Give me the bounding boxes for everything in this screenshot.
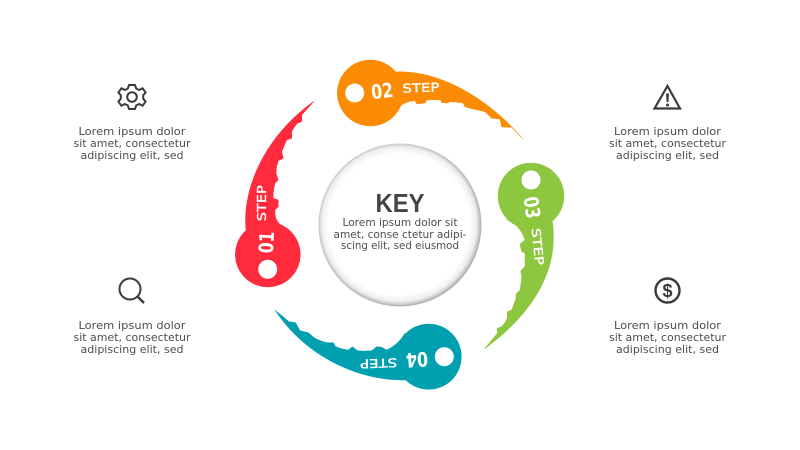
description <box>74 320 191 356</box>
item: money <box>609 278 727 356</box>
step 04 key <box>275 310 461 389</box>
label STEP: STEP <box>360 355 397 371</box>
icon: magnifier <box>120 278 144 303</box>
icon: gear <box>118 85 146 109</box>
number 01: 01 <box>254 231 279 254</box>
description <box>74 126 191 162</box>
icon: dollar coin: $ <box>662 281 673 301</box>
key hole <box>345 84 364 102</box>
center text: Lorem ipsum dolor sit <box>342 217 458 229</box>
description: adipiscing elit, sed <box>80 150 184 162</box>
item: settings <box>74 85 191 162</box>
description: sit amet, consectetur <box>74 138 191 150</box>
green key shape <box>484 163 564 349</box>
number 03: 03 <box>519 195 545 220</box>
step 02 key <box>337 60 523 139</box>
description: Lorem ipsum dolor <box>78 126 186 138</box>
orange key shape <box>337 60 523 139</box>
description: sit amet, consectetur <box>74 332 191 344</box>
description: sit amet, consectetur <box>609 332 727 344</box>
red key shape <box>235 101 314 287</box>
icon: warning triangle <box>654 86 680 108</box>
teal key shape <box>275 310 461 389</box>
center circle <box>318 144 482 306</box>
key hole <box>258 260 277 279</box>
description: Lorem ipsum dolor <box>614 320 722 332</box>
center text: scing elit, sed eiusmod <box>341 240 459 252</box>
label STEP: STEP <box>255 185 269 221</box>
circle disc <box>318 144 482 306</box>
description <box>609 126 727 162</box>
item: search <box>74 278 191 356</box>
number 04: 04 <box>405 347 429 372</box>
step 03 key <box>484 163 564 349</box>
description <box>609 320 727 356</box>
description: adipiscing elit, sed <box>616 344 719 356</box>
description: Lorem ipsum dolor <box>614 126 722 138</box>
label STEP: STEP <box>402 80 440 96</box>
description: Lorem ipsum dolor <box>78 320 186 332</box>
step 01 key <box>235 101 314 287</box>
center text <box>334 217 467 252</box>
center text: amet, conse ctetur adipi- <box>334 229 467 241</box>
number 02: 02 <box>370 78 395 104</box>
description: sit amet, consectetur <box>609 138 727 150</box>
heading KEY: KEY <box>376 188 424 218</box>
description: adipiscing elit, sed <box>80 344 184 356</box>
label STEP: STEP <box>529 227 546 266</box>
key hole <box>435 347 454 366</box>
description: adipiscing elit, sed <box>616 150 719 162</box>
item: warning <box>609 86 727 162</box>
key hole <box>522 170 540 190</box>
